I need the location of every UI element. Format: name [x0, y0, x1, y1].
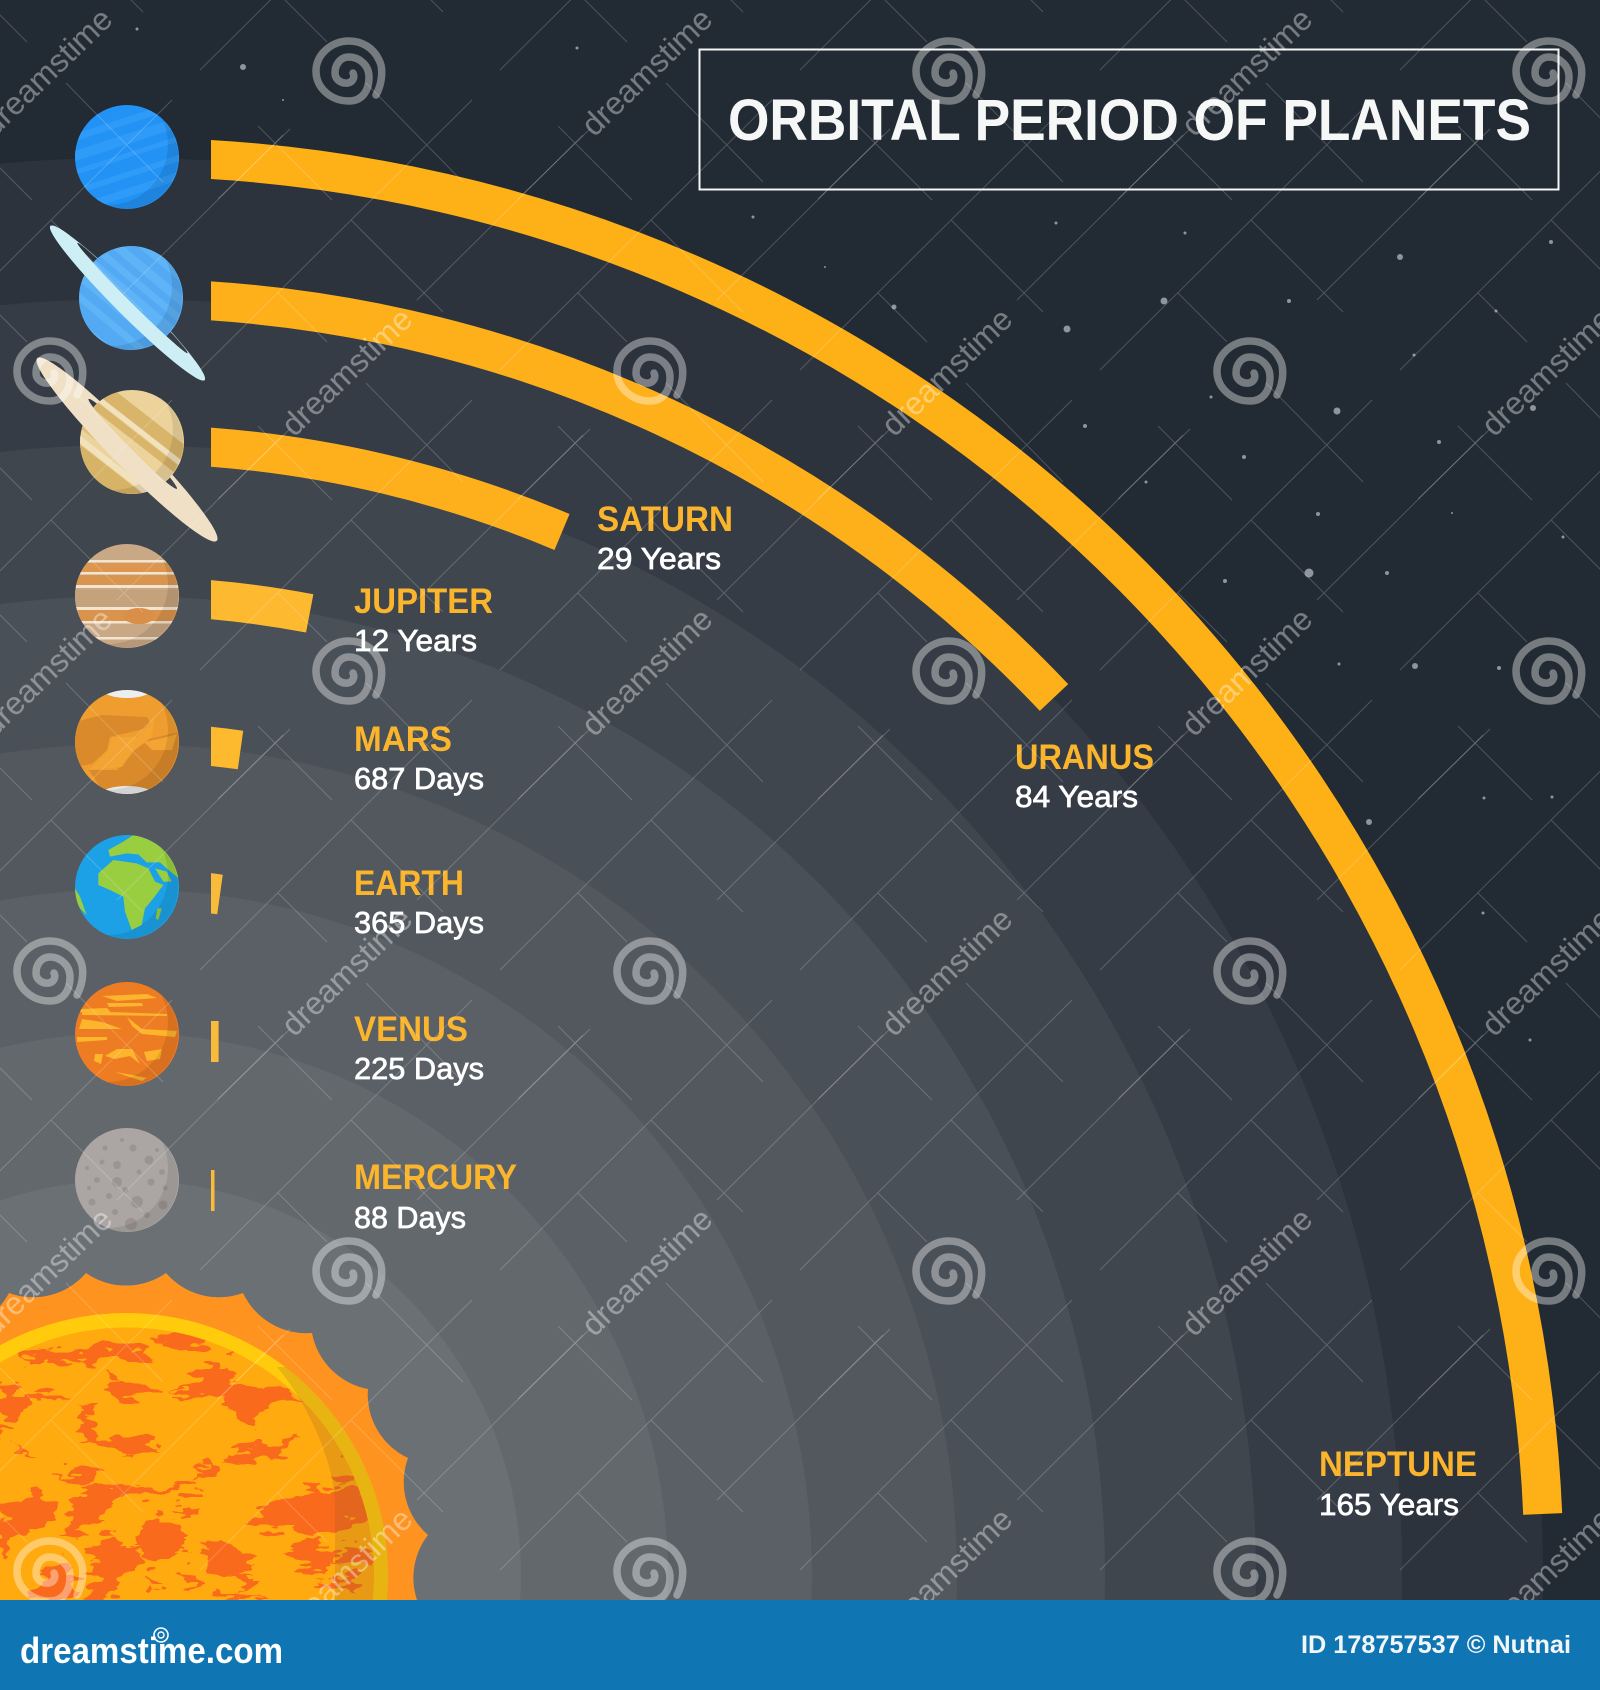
- bar: Earth orbit: [200, 892, 220, 894]
- footer bar: [0, 1600, 1600, 1690]
- bar: Jupiter orbit: [200, 599, 310, 613]
- title box: [700, 50, 1558, 190]
- sun blotches: [0, 1335, 370, 1600]
- watermark wordmarks: dreamstime: [874, 1501, 1019, 1643]
- label: Jupiter: JUPITER: [354, 582, 493, 621]
- planet: Mars: [75, 690, 179, 794]
- footer logo: dreamstime.com: [20, 1630, 283, 1671]
- sun surface: [0, 1327, 374, 1600]
- watermark wordmarks: dreamstime: [1174, 601, 1319, 743]
- watermark wordmarks: dreamstime: [874, 301, 1019, 443]
- watermark wordmarks: dreamstime: [574, 1201, 719, 1343]
- footer logo spiral: [154, 1628, 168, 1642]
- Saturn ring front: [36, 358, 218, 542]
- title text: ORBITAL PERIOD OF PLANETS: [728, 88, 1531, 153]
- label: Neptune: NEPTUNE: [1319, 1445, 1477, 1484]
- planet: Jupiter: [75, 544, 179, 648]
- watermark wordmarks: dreamstime: [574, 601, 719, 743]
- watermark wordmarks: dreamstime: [274, 901, 419, 1043]
- label: Mars: [354, 720, 484, 796]
- watermark wordmarks: dreamstime: [1174, 1, 1319, 143]
- label: Earth: 365 Days: [354, 905, 484, 940]
- Saturn globe: [80, 390, 184, 494]
- bar: Mars orbit: [200, 745, 240, 750]
- label: Mercury: 88 Days: [354, 1200, 466, 1235]
- sun corona: [0, 1273, 428, 1600]
- watermark wordmarks: dreamstime: [574, 1, 719, 143]
- label: Mars: 687 Days: [354, 761, 484, 796]
- planet: Venus: [75, 982, 179, 1086]
- bar: Venus orbit: [211, 1021, 219, 1062]
- watermark wordmarks: dreamstime: [1174, 1201, 1319, 1343]
- watermark wordmarks: dreamstime: [874, 901, 1019, 1043]
- watermark wordmarks: dreamstime: [274, 1501, 419, 1643]
- label: Mercury: MERCURY: [354, 1158, 517, 1197]
- sun yellow rim: [0, 1313, 388, 1600]
- Uranus globe: [79, 246, 183, 350]
- planet: Uranus with ring: [50, 226, 206, 380]
- bar: Uranus orbit: [200, 300, 1054, 698]
- planet: Mercury: [75, 1128, 179, 1232]
- bar: Saturn orbit: [200, 446, 562, 532]
- label: Saturn: [597, 500, 733, 576]
- Uranus ring back: [42, 217, 213, 389]
- label: Saturn: SATURN: [597, 500, 733, 539]
- label: Jupiter: 12 Years: [354, 623, 477, 658]
- bar: Mercury orbit: [211, 1170, 214, 1211]
- label: Uranus: [1015, 738, 1154, 814]
- planet: Saturn with ring: [36, 358, 218, 542]
- sun shaded limb: [277, 1367, 388, 1600]
- Saturn ring back: [26, 347, 228, 552]
- Uranus ring front: [50, 226, 205, 380]
- stars: [136, 28, 1564, 1042]
- label: Uranus: URANUS: [1015, 738, 1154, 777]
- label: Venus: [354, 1010, 484, 1086]
- watermark wordmarks: dreamstime: [274, 301, 419, 443]
- label: Mars: MARS: [354, 720, 452, 759]
- planet: Earth: [75, 835, 179, 939]
- footer image id: ID 178757537 © Nutnai: [1301, 1631, 1571, 1659]
- sun: [0, 1273, 430, 1600]
- label: Venus: 225 Days: [354, 1051, 484, 1086]
- label: Venus: VENUS: [354, 1010, 468, 1049]
- label: Neptune: 165 Years: [1319, 1487, 1459, 1522]
- bar: Neptune orbit: [200, 159, 1543, 1514]
- label: Earth: [354, 864, 484, 940]
- label: Mercury: [354, 1158, 517, 1235]
- planet: Neptune: [75, 105, 179, 209]
- label: Saturn: 29 Years: [597, 541, 721, 576]
- label: Jupiter: [354, 582, 493, 658]
- label: Uranus: 84 Years: [1015, 779, 1138, 814]
- label: Neptune: [1319, 1445, 1477, 1522]
- label: Earth: EARTH: [354, 864, 464, 903]
